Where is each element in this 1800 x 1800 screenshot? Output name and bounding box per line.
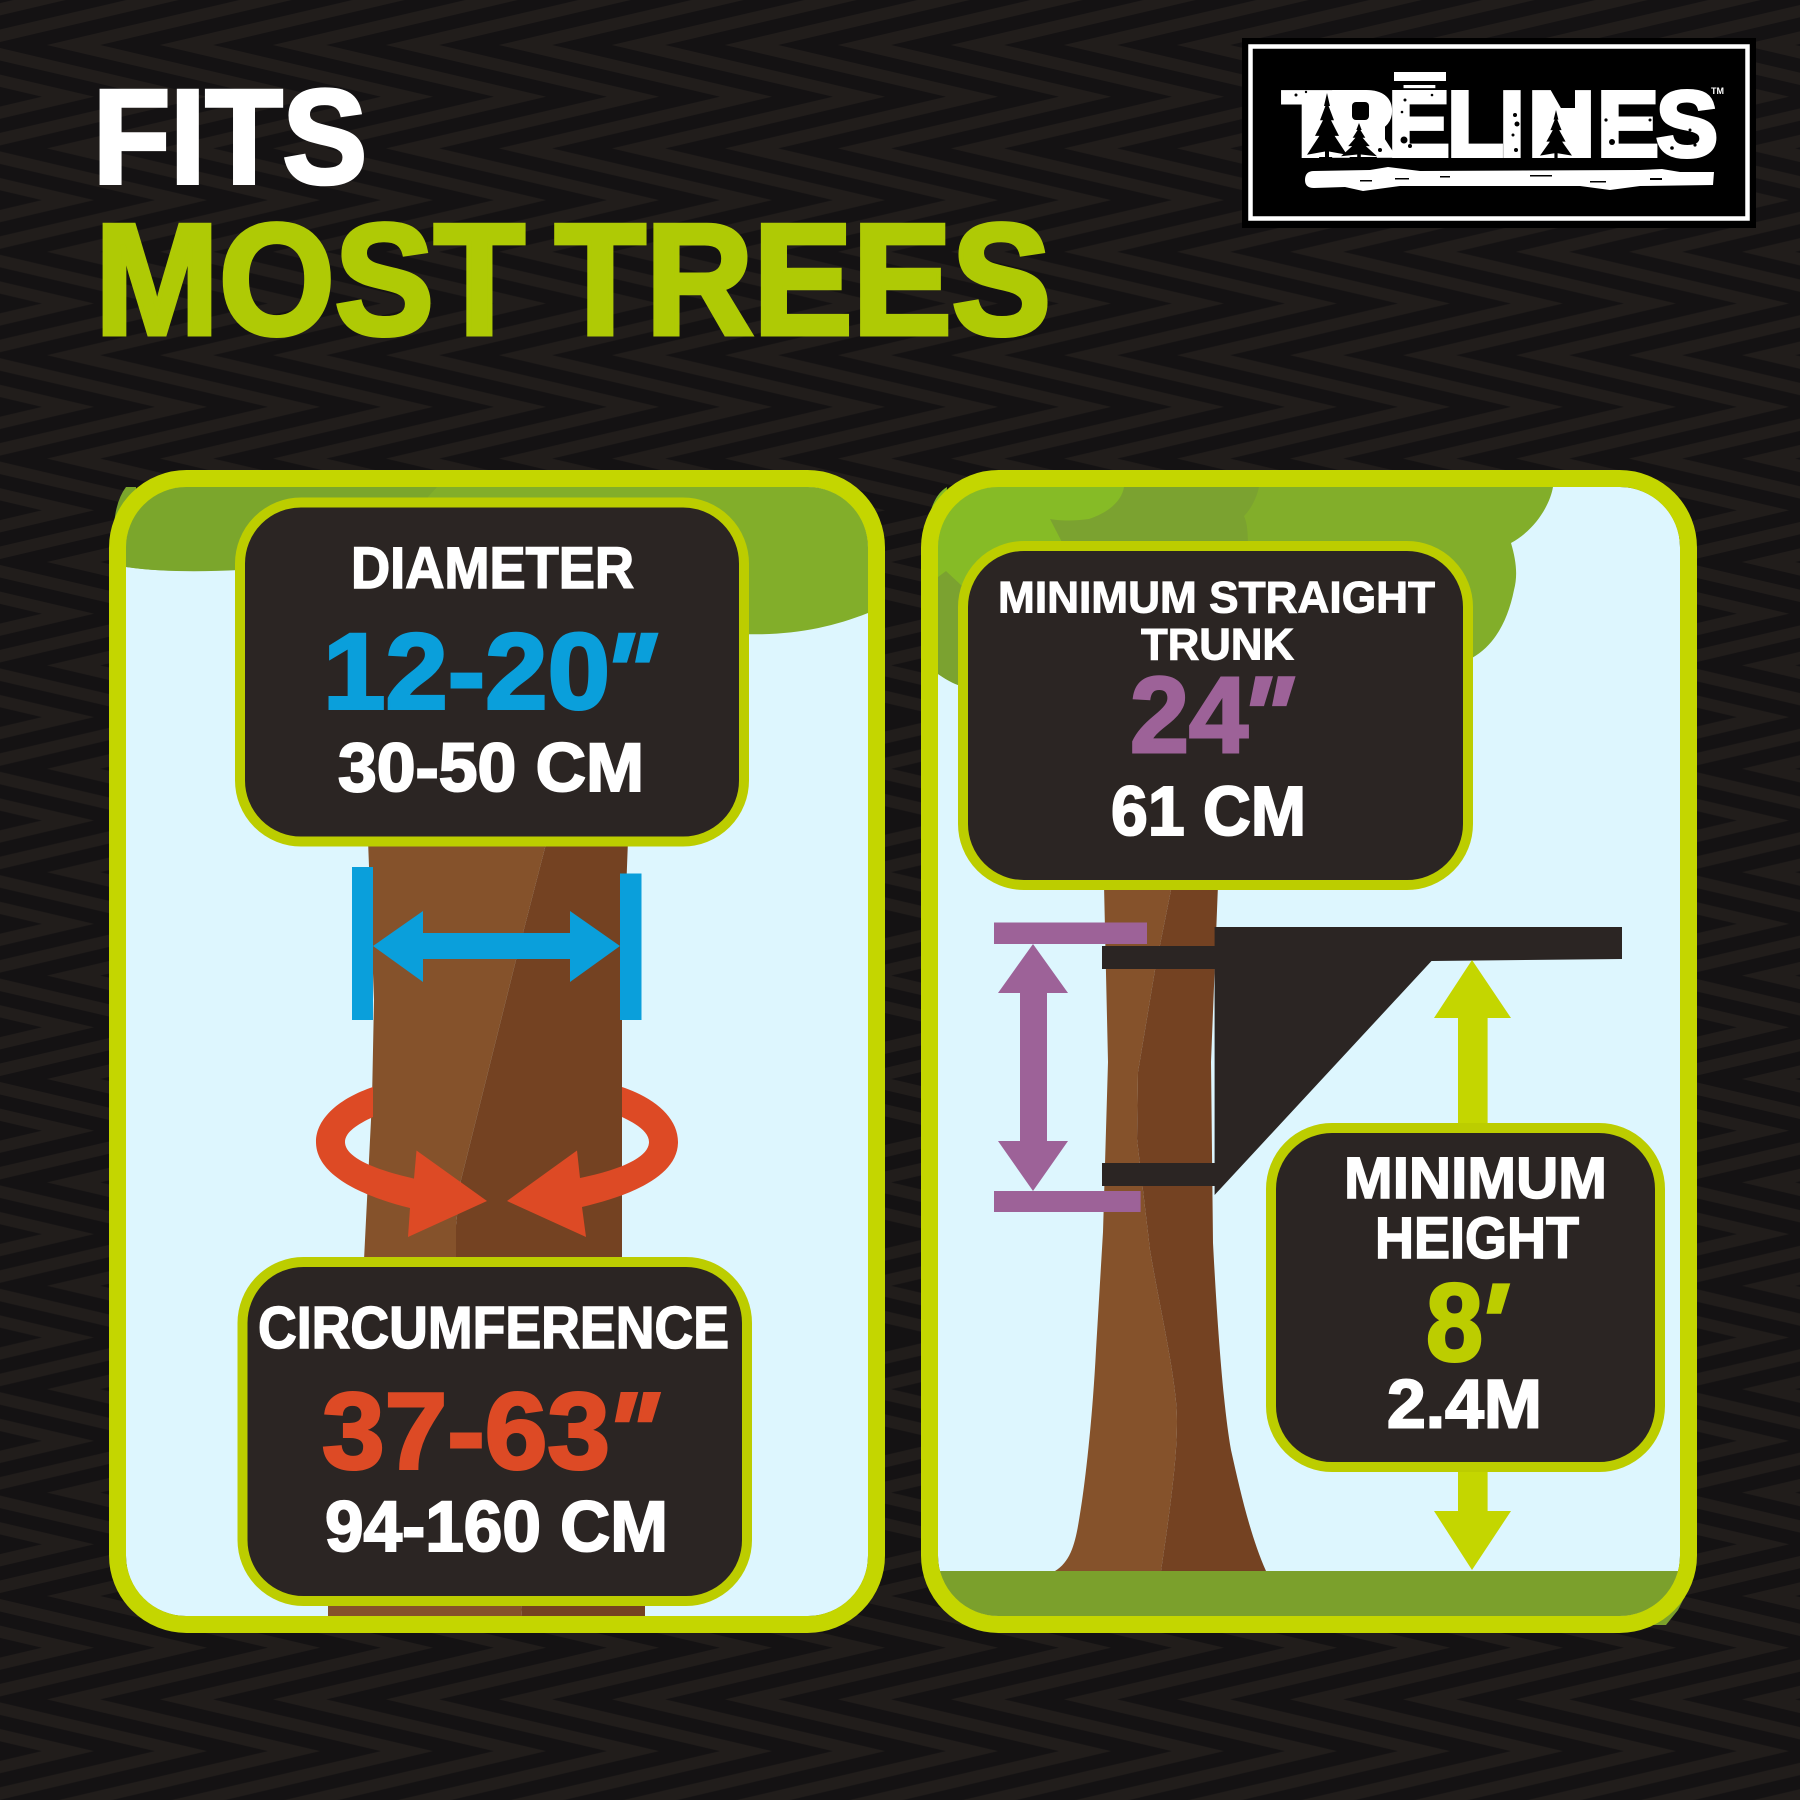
straight trunk heading bbox=[998, 574, 1435, 670]
height arrow bbox=[1434, 960, 1511, 1570]
tree canopy bbox=[126, 487, 868, 634]
stand bracket bbox=[1102, 927, 1622, 1195]
circumference inches: 37-63 bbox=[322, 1370, 610, 1492]
circumference heading: CIRCUMFERENCE bbox=[258, 1294, 729, 1361]
diameter inches: 12-20 bbox=[323, 610, 610, 732]
callout: diameter bbox=[240, 502, 744, 842]
ground bbox=[940, 1571, 1678, 1616]
height metres: 2.4M bbox=[1387, 1366, 1542, 1442]
panel sky bbox=[126, 487, 868, 1616]
circumference arrows bbox=[316, 1087, 678, 1237]
straight trunk heading: MINIMUM STRAIGHT bbox=[998, 574, 1435, 622]
diameter inches: " bbox=[588, 612, 669, 732]
straight trunk heading: TRUNK bbox=[1141, 620, 1294, 670]
straight trunk inches bbox=[1130, 654, 1306, 776]
height feet: ' bbox=[1463, 1261, 1520, 1384]
logo: Trelines: TRĒLINES bbox=[1282, 72, 1718, 176]
straight trunk inches: 24 bbox=[1130, 654, 1248, 775]
diameter heading: DIAMETER bbox=[351, 536, 634, 601]
height heading: MINIMUM bbox=[1344, 1146, 1607, 1211]
tree trunk bbox=[1055, 885, 1266, 1571]
straight trunk arrow bbox=[994, 922, 1147, 1212]
panel sky bbox=[938, 487, 1680, 1616]
logo: Trelines bbox=[1242, 38, 1756, 228]
panel border bbox=[118, 478, 876, 1624]
straight trunk centimetres: 61 CM bbox=[1111, 772, 1306, 850]
height heading: HEIGHT bbox=[1375, 1206, 1579, 1271]
diameter centimetres: 30-50 CM bbox=[338, 729, 644, 806]
logo: Trelines: TM bbox=[1711, 86, 1724, 96]
callout: minimum height bbox=[1271, 1128, 1660, 1467]
tree trunk bbox=[328, 840, 645, 1616]
height feet: 8 bbox=[1426, 1262, 1483, 1384]
circumference centimetres: 94-160 CM bbox=[325, 1488, 668, 1567]
callout: minimum straight trunk bbox=[963, 546, 1468, 885]
title line: most trees: MOST TREES bbox=[95, 192, 1051, 368]
height heading bbox=[1344, 1146, 1607, 1271]
panel: straight trunk and height bbox=[928, 478, 1688, 1633]
diameter arrow bbox=[352, 867, 642, 1020]
panel: diameter and circumference bbox=[114, 478, 876, 1624]
straight trunk inches: " bbox=[1225, 655, 1306, 776]
panel border bbox=[930, 478, 1688, 1624]
title line: fits: FITS bbox=[93, 63, 367, 212]
tree canopy bbox=[938, 487, 1553, 700]
title bbox=[93, 63, 1051, 368]
height feet bbox=[1426, 1261, 1520, 1384]
circumference inches: " bbox=[590, 1371, 672, 1492]
callout: circumference bbox=[242, 1262, 747, 1601]
